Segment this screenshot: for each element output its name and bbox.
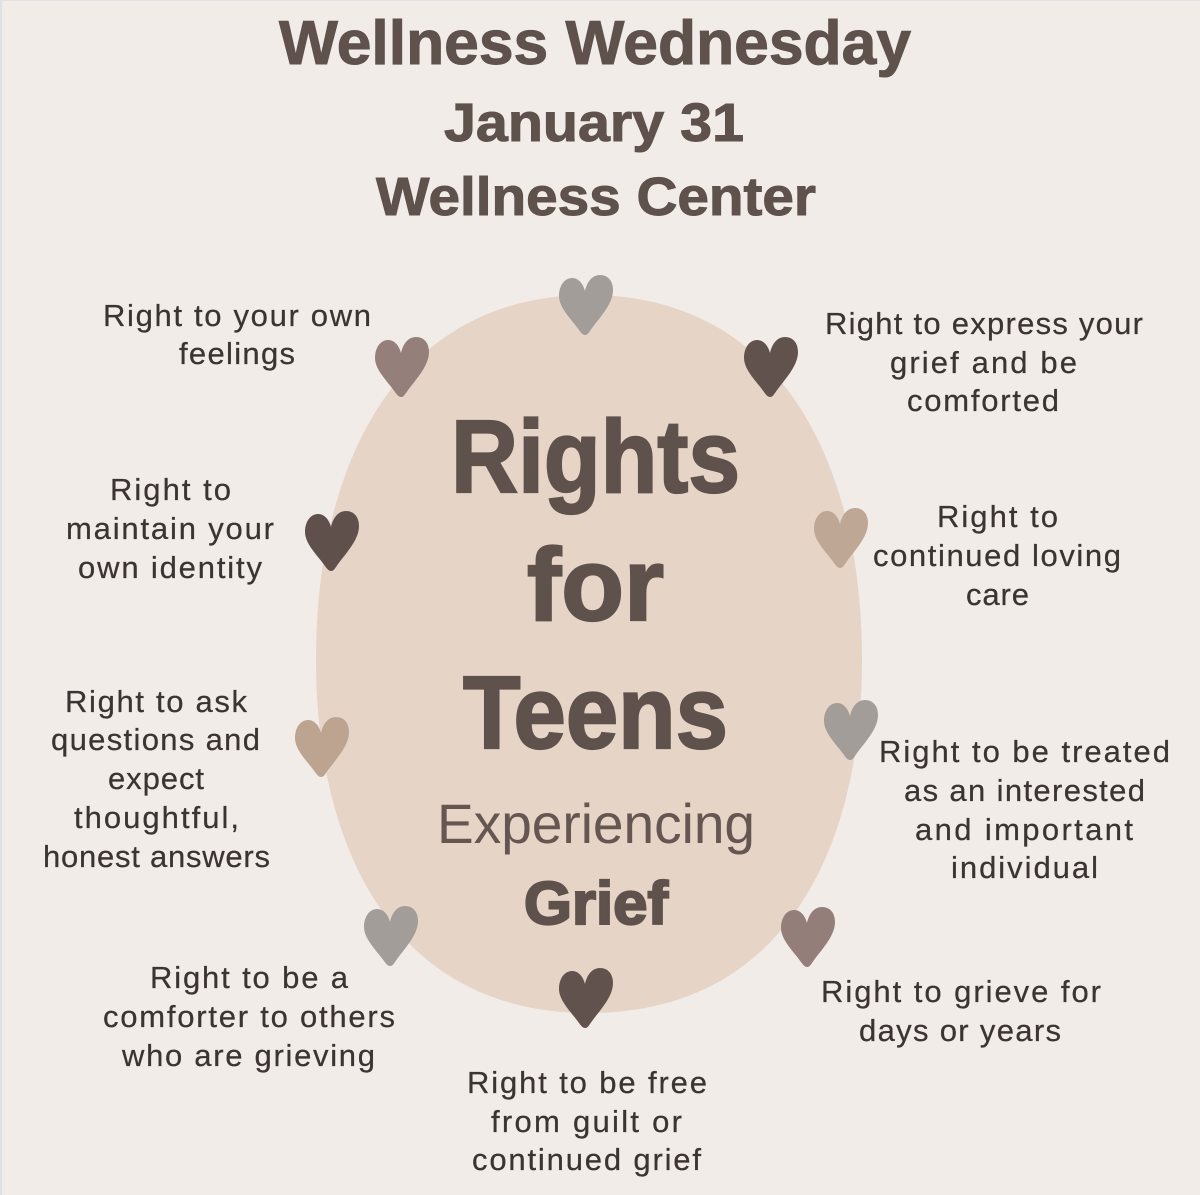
text: right to grieve for days or years <box>821 974 1101 1048</box>
title: Wellness Wednesday: January 31 <box>444 93 744 153</box>
text: right to maintain your own identity: maintain your <box>66 511 274 546</box>
text: right to be a comforter to others: Right to be a <box>150 960 349 995</box>
text: right to be treated as an interested and important individual: and important <box>915 812 1133 847</box>
text: right to be treated as an interested and important individual: as an interested <box>904 773 1145 808</box>
text: right to your own feelings: Right to your own <box>103 298 371 333</box>
central heading: Rights for Teens Experiencing Grief: Grief <box>524 870 669 937</box>
text: right to continued loving care: Right to <box>937 499 1058 534</box>
text: right to ask questions: questions and <box>51 722 260 757</box>
text: right to express your grief: comforted <box>907 383 1059 418</box>
text: right to your own feelings: feelings <box>179 336 295 371</box>
text: right to be free from guilt: continued grief <box>472 1142 701 1177</box>
text: right to continued loving care: care <box>966 577 1029 612</box>
text: right to grieve for days or years: days or years <box>859 1013 1061 1048</box>
text: right to maintain your own identity: own identity <box>78 550 262 585</box>
text: right to ask questions: thoughtful, <box>74 800 239 835</box>
text: right to continued loving care <box>873 499 1121 612</box>
text: right to express your grief: Right to express your <box>825 306 1143 341</box>
text: right to grieve for days or years: Right to grieve for <box>821 974 1101 1009</box>
icon: heart upper right <box>744 337 798 397</box>
icon: heart bottom left <box>364 906 418 966</box>
text: right to be treated as an interested and important individual: individual <box>951 850 1098 885</box>
text: right to be treated as an interested and important individual <box>879 734 1170 885</box>
text: right to be a comforter to others: who are grieving <box>121 1038 375 1073</box>
central heading: Rights for Teens Experiencing Grief: Rights <box>451 399 740 514</box>
text: right to be a comforter to others <box>103 960 395 1073</box>
icon: heart lower right <box>824 700 878 760</box>
icon: heart left <box>305 511 359 571</box>
central heading: Rights for Teens Experiencing Grief: Teens <box>463 655 728 770</box>
icon: heart bottom center <box>559 968 613 1028</box>
central heading: Rights for Teens Experiencing Grief: for <box>527 527 664 642</box>
icon: heart lower left <box>295 717 349 777</box>
text: right to your own feelings <box>103 298 371 371</box>
icon: heart bottom right <box>781 907 835 967</box>
text: right to ask questions: expect <box>108 761 204 796</box>
central blob shape <box>316 295 862 1013</box>
central heading: Rights for Teens Experiencing Grief: Experiencing <box>437 792 755 855</box>
text: right to be treated as an interested and important individual: Right to be treated <box>879 734 1170 769</box>
title: Wellness Wednesday <box>279 9 912 227</box>
text: right to continued loving care: continued loving <box>873 538 1121 573</box>
text: right to ask questions: Right to ask <box>65 684 248 719</box>
icon: heart right <box>814 508 868 568</box>
text: right to be free from guilt: from guilt or <box>491 1104 682 1139</box>
text: right to be a comforter to others: comforter to others <box>103 999 395 1034</box>
text: right to maintain your own identity <box>66 472 274 585</box>
text: right to be free from guilt <box>467 1065 707 1177</box>
central heading: Rights for Teens Experiencing Grief <box>437 399 755 937</box>
text: right to ask questions <box>43 684 270 874</box>
icon: heart upper left <box>375 337 429 397</box>
text: right to be free from guilt: Right to be free <box>467 1065 707 1100</box>
text: right to express your grief: grief and be <box>890 345 1077 380</box>
title: Wellness Wednesday: Wellness Center <box>376 167 816 227</box>
icon: heart top center <box>559 275 613 335</box>
text: right to ask questions: honest answers <box>43 839 270 874</box>
text: right to maintain your own identity: Right to <box>110 472 231 507</box>
text: right to express your grief <box>825 306 1143 418</box>
title: Wellness Wednesday: Wellness Wednesday <box>279 9 912 78</box>
